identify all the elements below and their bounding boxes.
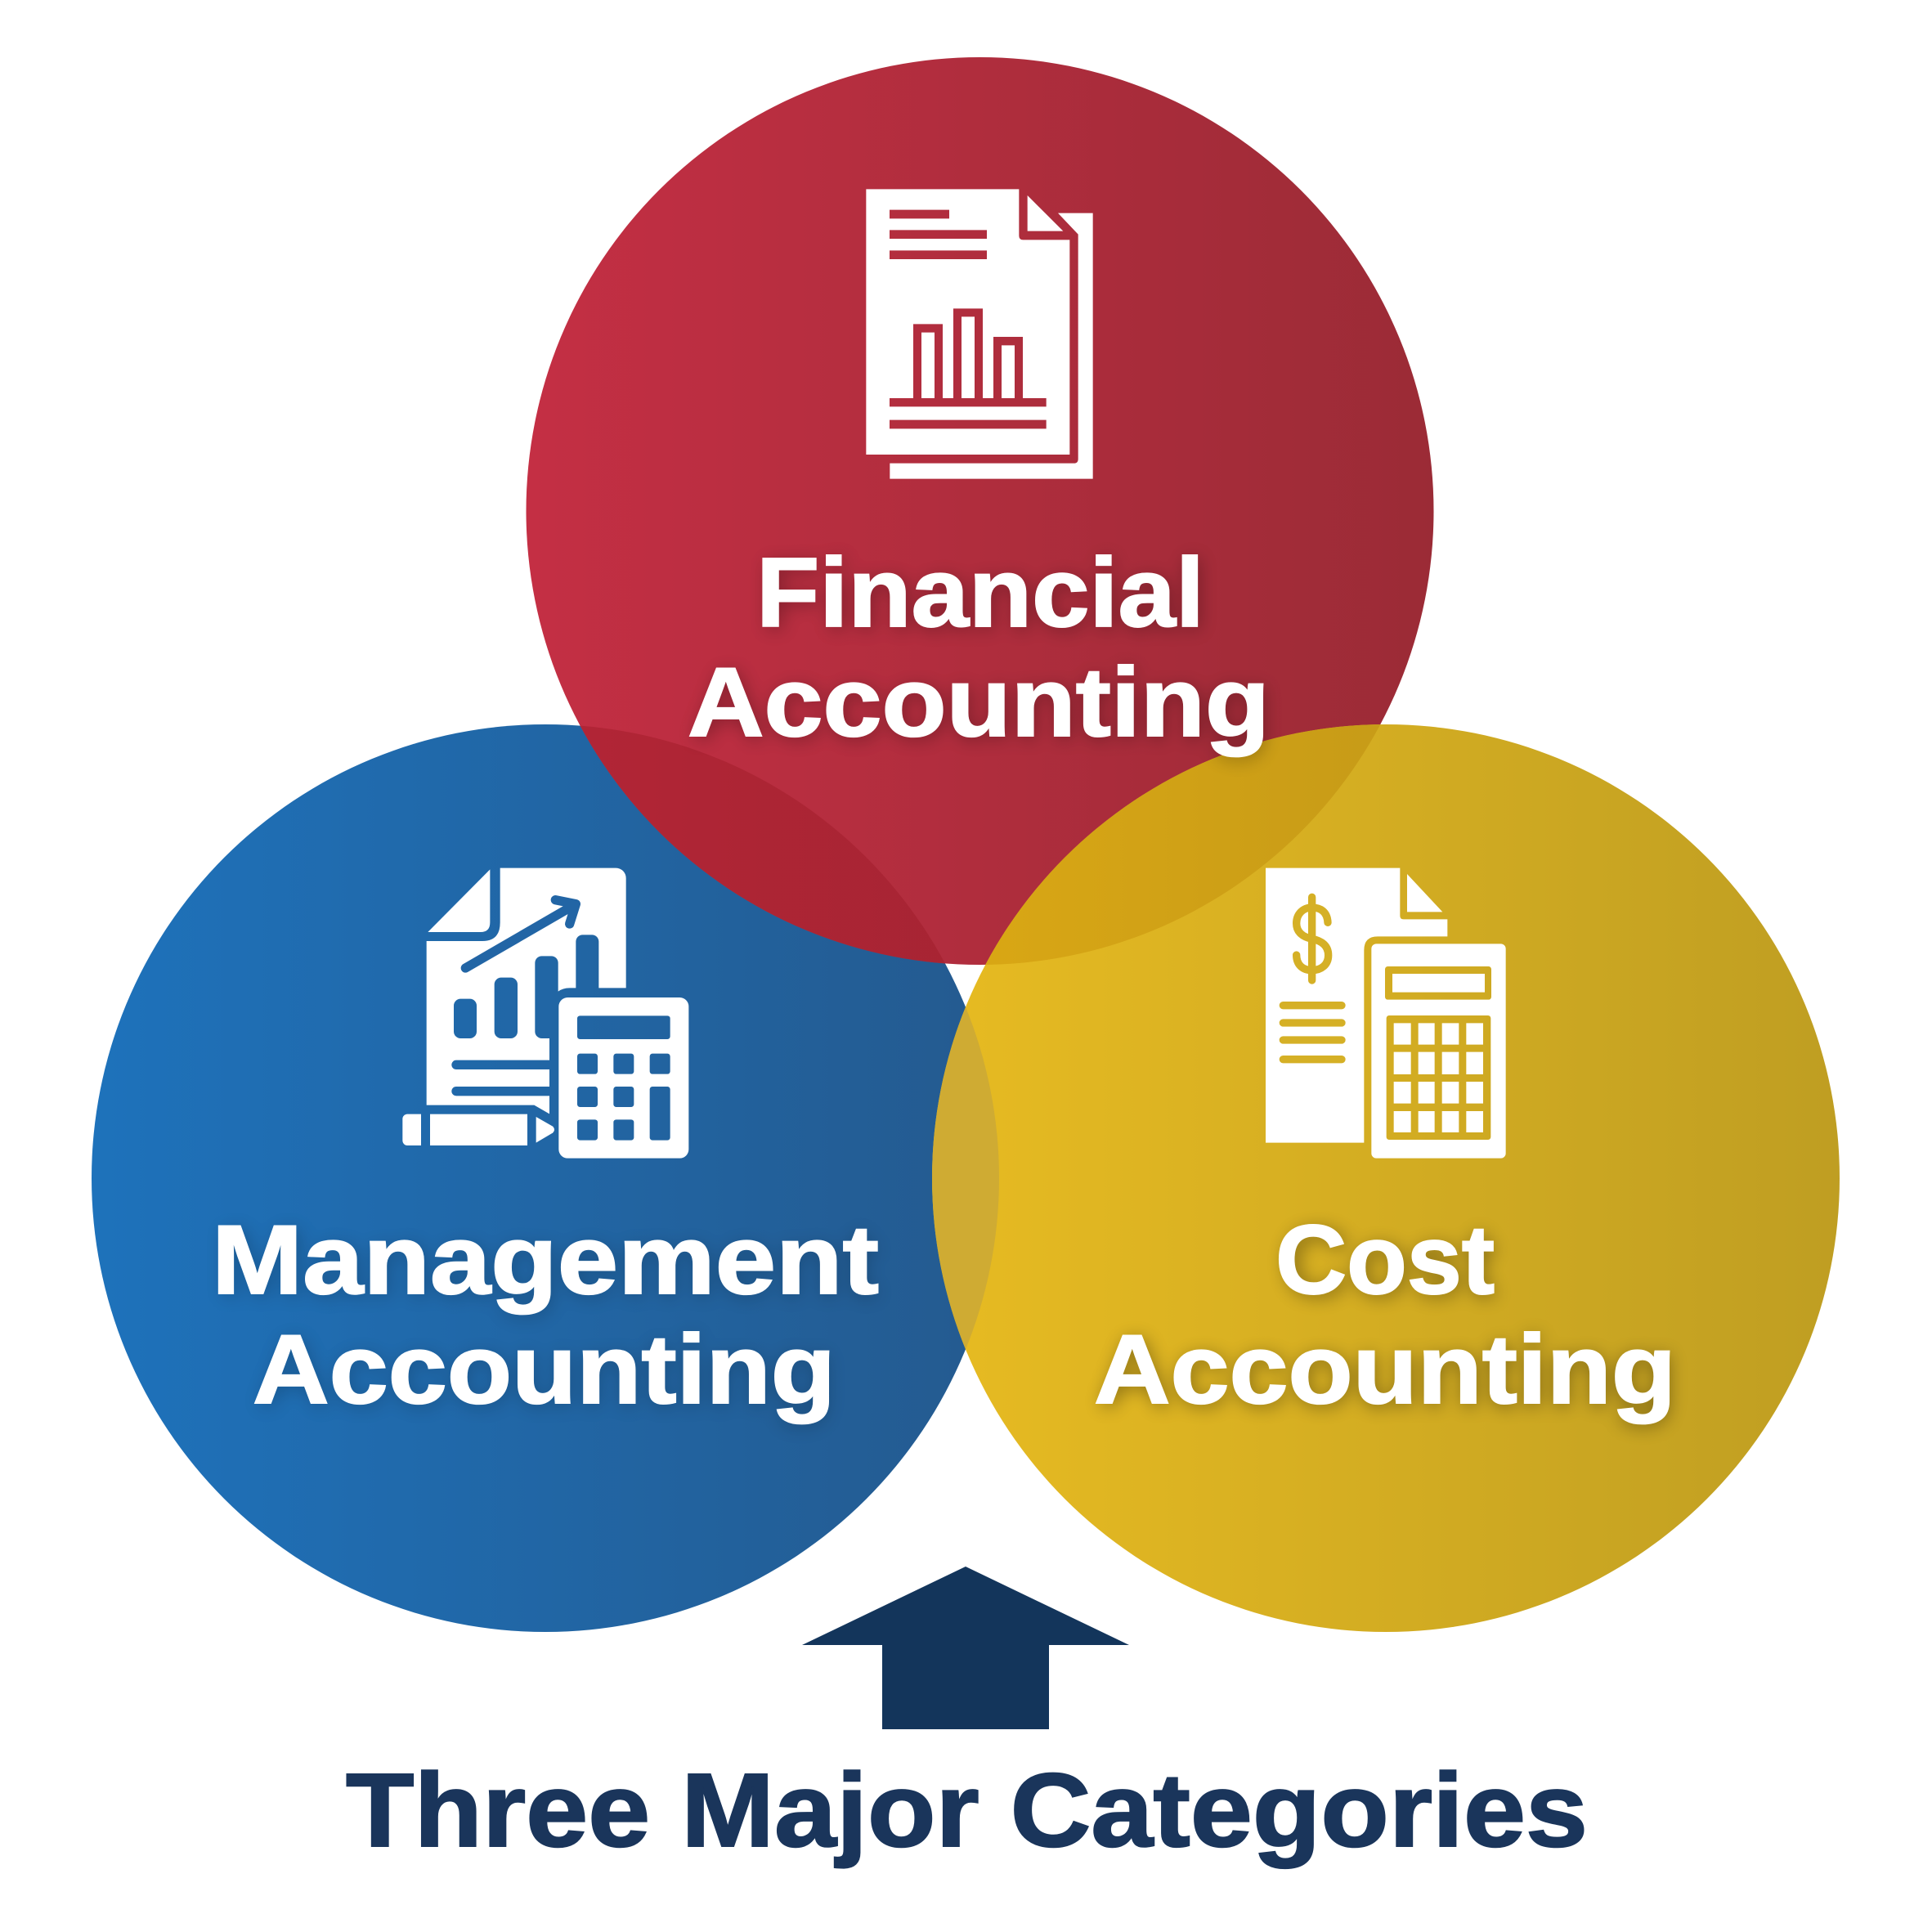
overlap: blue and yellow [932,1007,999,1349]
label: Management Accounting: Accounting [256,1318,835,1428]
label: Financial Accounting: Accounting [688,648,1270,757]
icon: financial report document [866,189,1093,479]
icon: cost sheet with dollar sign and calculator [1266,868,1506,1159]
label: Cost Accounting: Cost [1281,1208,1496,1318]
label: Management Accounting: Management [217,1208,879,1318]
caption: Three Major Categories: Three Major Categories [346,1752,1588,1869]
label: Financial Accounting: Financial [760,541,1207,651]
label: Management Accounting: Accounting [253,1315,836,1424]
overlap: red and blue [580,726,945,963]
icon: management report with calculator and pencil [402,868,688,1159]
circle: management accounting (blue) [92,724,999,1632]
label: Cost Accounting: Cost [1275,1205,1495,1315]
label: Management Accounting: Management [212,1205,879,1315]
label: Financial Accounting [688,538,1271,760]
circle: financial accounting (red) [527,57,1434,965]
label: Cost Accounting [1094,1205,1676,1428]
overlap: red and yellow [985,724,1380,965]
label: Cost Accounting: Accounting [1094,1315,1676,1424]
label: Financial Accounting: Accounting [691,651,1271,760]
label: Management Accounting [212,1205,879,1428]
label: Financial Accounting: Financial [756,538,1204,648]
circle: cost accounting (yellow) [932,724,1840,1632]
arrow: pointing up from caption to the circles [802,1567,1129,1729]
label: Cost Accounting: Accounting [1097,1318,1676,1428]
